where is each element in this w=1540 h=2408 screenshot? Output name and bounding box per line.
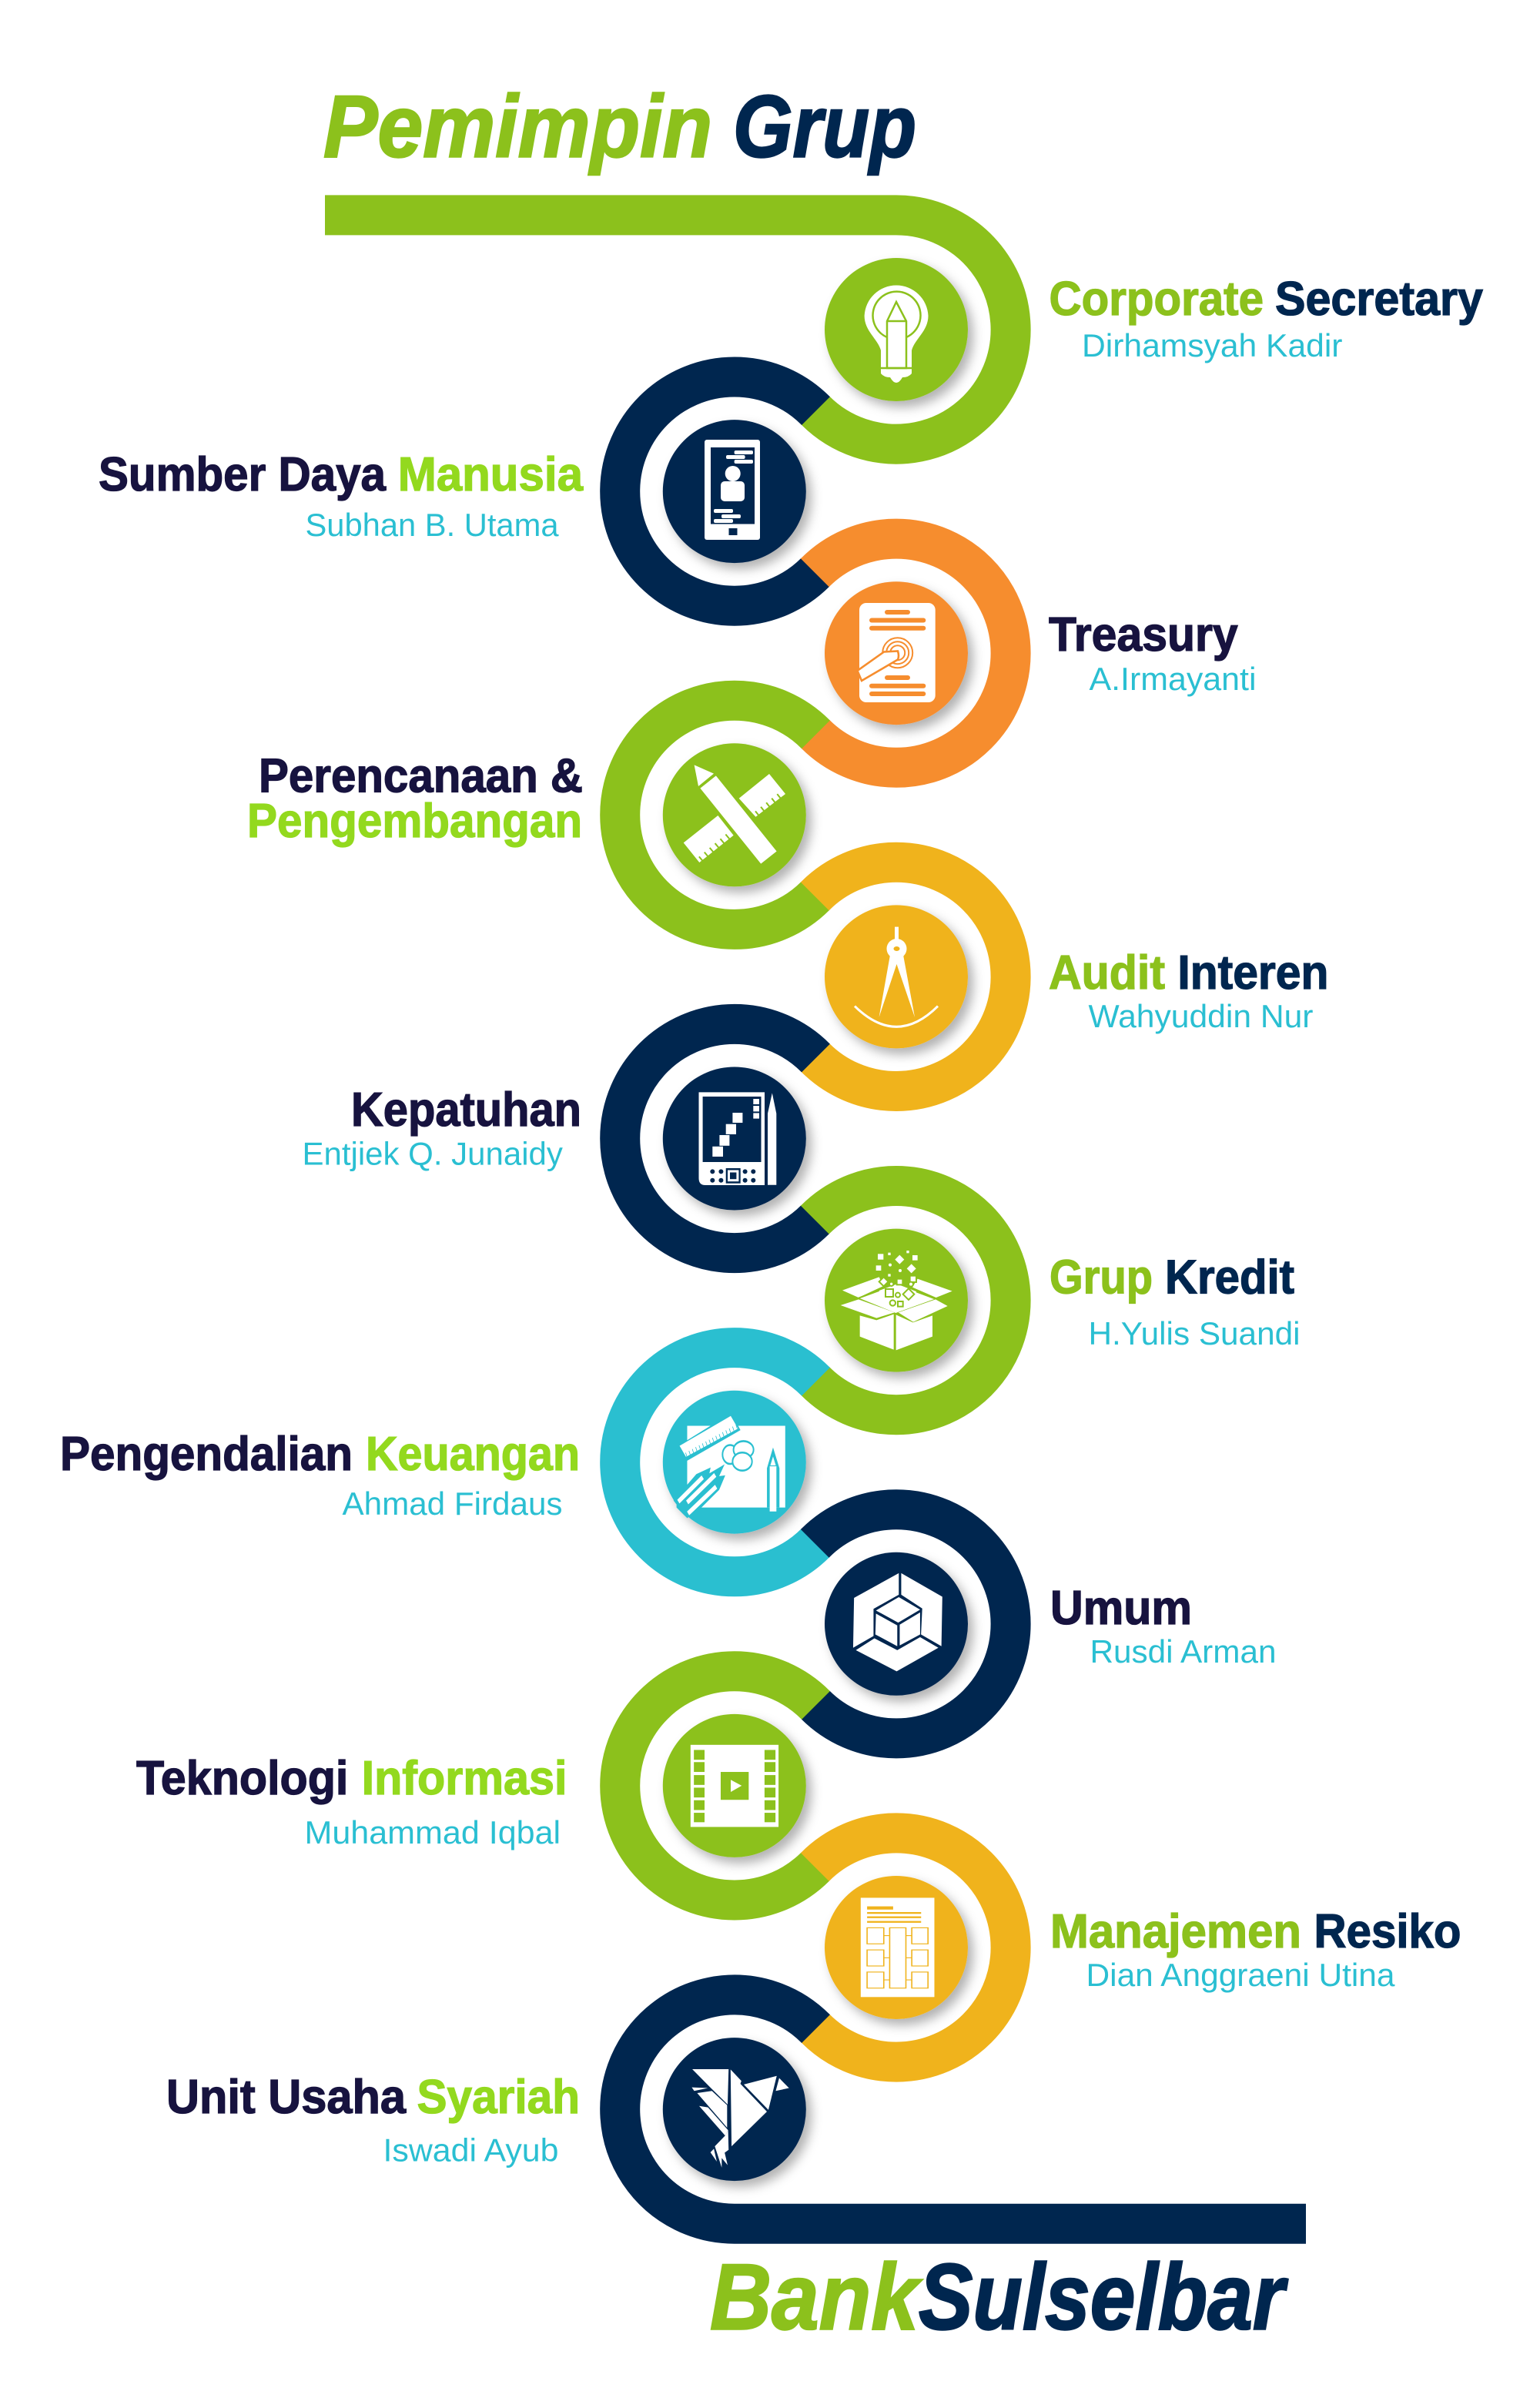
name: Wahyuddin Nur — [1089, 998, 1314, 1034]
heading: Informasi — [362, 1752, 567, 1805]
heading — [1049, 273, 1483, 326]
ribbon arc — [815, 1186, 1011, 1415]
heading: Keuangan — [366, 1428, 580, 1481]
heading: Kepatuhan — [351, 1083, 581, 1137]
heading: Pengendalian — [60, 1428, 353, 1481]
icon disc — [663, 1067, 806, 1211]
step 7: Grup Kredit — [815, 1186, 1300, 1415]
heading: Manajemen — [1050, 1905, 1301, 1958]
icon disc — [825, 905, 968, 1048]
ribbon: navy arc and bottom bar — [620, 1994, 1306, 2224]
title: Grup — [733, 79, 916, 176]
name: Dian Anggraeni Utina — [1086, 1957, 1395, 1993]
icon disc — [825, 1229, 968, 1372]
name: Entjiek Q. Junaidy — [302, 1136, 563, 1172]
icon disc — [825, 581, 968, 725]
heading: Manusia — [398, 448, 584, 501]
heading: Resiko — [1314, 1905, 1461, 1958]
heading: Umum — [1050, 1582, 1192, 1635]
icon disc — [825, 258, 968, 401]
icon disc — [663, 1391, 806, 1534]
step 3: Treasury — [815, 539, 1257, 768]
heading: Interen — [1177, 946, 1328, 1000]
icon: report layout — [861, 1897, 934, 1997]
heading: Unit Usaha — [166, 2071, 406, 2124]
heading: Sumber Daya — [99, 448, 386, 501]
icon: origami bird — [691, 2069, 789, 2168]
heading — [60, 1428, 580, 1481]
heading: Syariah — [417, 2071, 580, 2124]
icon: compass — [855, 927, 938, 1026]
logo: BankSulselbar — [710, 2244, 1289, 2349]
heading — [1049, 946, 1328, 1000]
ribbon arc — [815, 1509, 1011, 1738]
heading: Audit — [1049, 946, 1165, 1000]
icon: light bulb pencil — [865, 286, 929, 383]
step 12: Unit Usaha Syariah — [166, 1994, 1306, 2224]
icon: pencil and rulers — [684, 765, 785, 865]
heading — [166, 2071, 580, 2124]
heading: Treasury — [1049, 608, 1238, 661]
name: Ahmad Firdaus — [342, 1485, 562, 1522]
step 10: Teknologi Informasi — [136, 1671, 816, 1901]
name: A.Irmayanti — [1089, 661, 1257, 697]
heading: Teknologi — [136, 1752, 348, 1805]
heading: Perencanaan & — [259, 750, 583, 803]
name: Iswadi Ayub — [383, 2132, 559, 2169]
icon disc — [663, 420, 806, 563]
heading — [136, 1752, 567, 1805]
heading — [247, 750, 583, 848]
ribbon arc — [815, 1833, 1011, 2062]
icon disc — [663, 743, 806, 886]
icon disc — [663, 1714, 806, 1857]
icon: film strip — [691, 1745, 778, 1827]
icon disc — [663, 2038, 806, 2181]
heading: Corporate — [1049, 273, 1264, 326]
icon: tablet and stylus — [699, 1092, 776, 1185]
ribbon arc — [620, 1024, 816, 1253]
heading — [1050, 1905, 1461, 1958]
step 6: Kepatuhan — [302, 1024, 816, 1253]
icon: document with tap — [858, 603, 936, 702]
name: Rusdi Arman — [1090, 1633, 1277, 1670]
heading: Grup — [1050, 1251, 1153, 1304]
ribbon arc — [620, 1671, 816, 1901]
title: Pemimpin — [323, 79, 712, 176]
heading — [99, 448, 584, 501]
step 11: Manajemen Resiko — [815, 1833, 1461, 2062]
step 8: Pengendalian Keuangan — [60, 1348, 816, 1576]
name: H.Yulis Suandi — [1089, 1315, 1300, 1351]
icon: open box — [841, 1251, 952, 1350]
ribbon arc — [815, 539, 1011, 768]
ribbon arc — [620, 377, 816, 606]
name: Subhan B. Utama — [305, 507, 559, 543]
icon disc — [825, 1552, 968, 1696]
step 1: Corporate Secretary — [325, 215, 1483, 444]
heading: Kredit — [1165, 1251, 1294, 1304]
name: Dirhamsyah Kadir — [1082, 327, 1343, 363]
step 5: Audit Interen — [815, 862, 1328, 1091]
step 9: Umum — [815, 1509, 1277, 1738]
icon: cube — [853, 1573, 942, 1671]
ribbon arc — [620, 701, 816, 929]
logo: BankSulselbar: Sulselbar — [919, 2244, 1289, 2349]
heading — [1050, 1251, 1294, 1304]
ribbon arc — [620, 1348, 816, 1576]
step 2: Sumber Daya Manusia — [99, 377, 816, 606]
icon disc — [825, 1876, 968, 2019]
heading: Pengembangan — [247, 795, 582, 848]
step 4: Perencanaan & Pengembangan — [247, 701, 816, 929]
icon: drawing board — [674, 1413, 785, 1518]
heading: Secretary — [1275, 273, 1483, 326]
ribbon: top bar and green arc — [325, 215, 1011, 444]
logo: BankSulselbar: Bank — [710, 2244, 922, 2349]
icon: smartphone profile — [705, 440, 760, 540]
name: Muhammad Iqbal — [305, 1814, 561, 1850]
ribbon arc — [815, 862, 1011, 1091]
